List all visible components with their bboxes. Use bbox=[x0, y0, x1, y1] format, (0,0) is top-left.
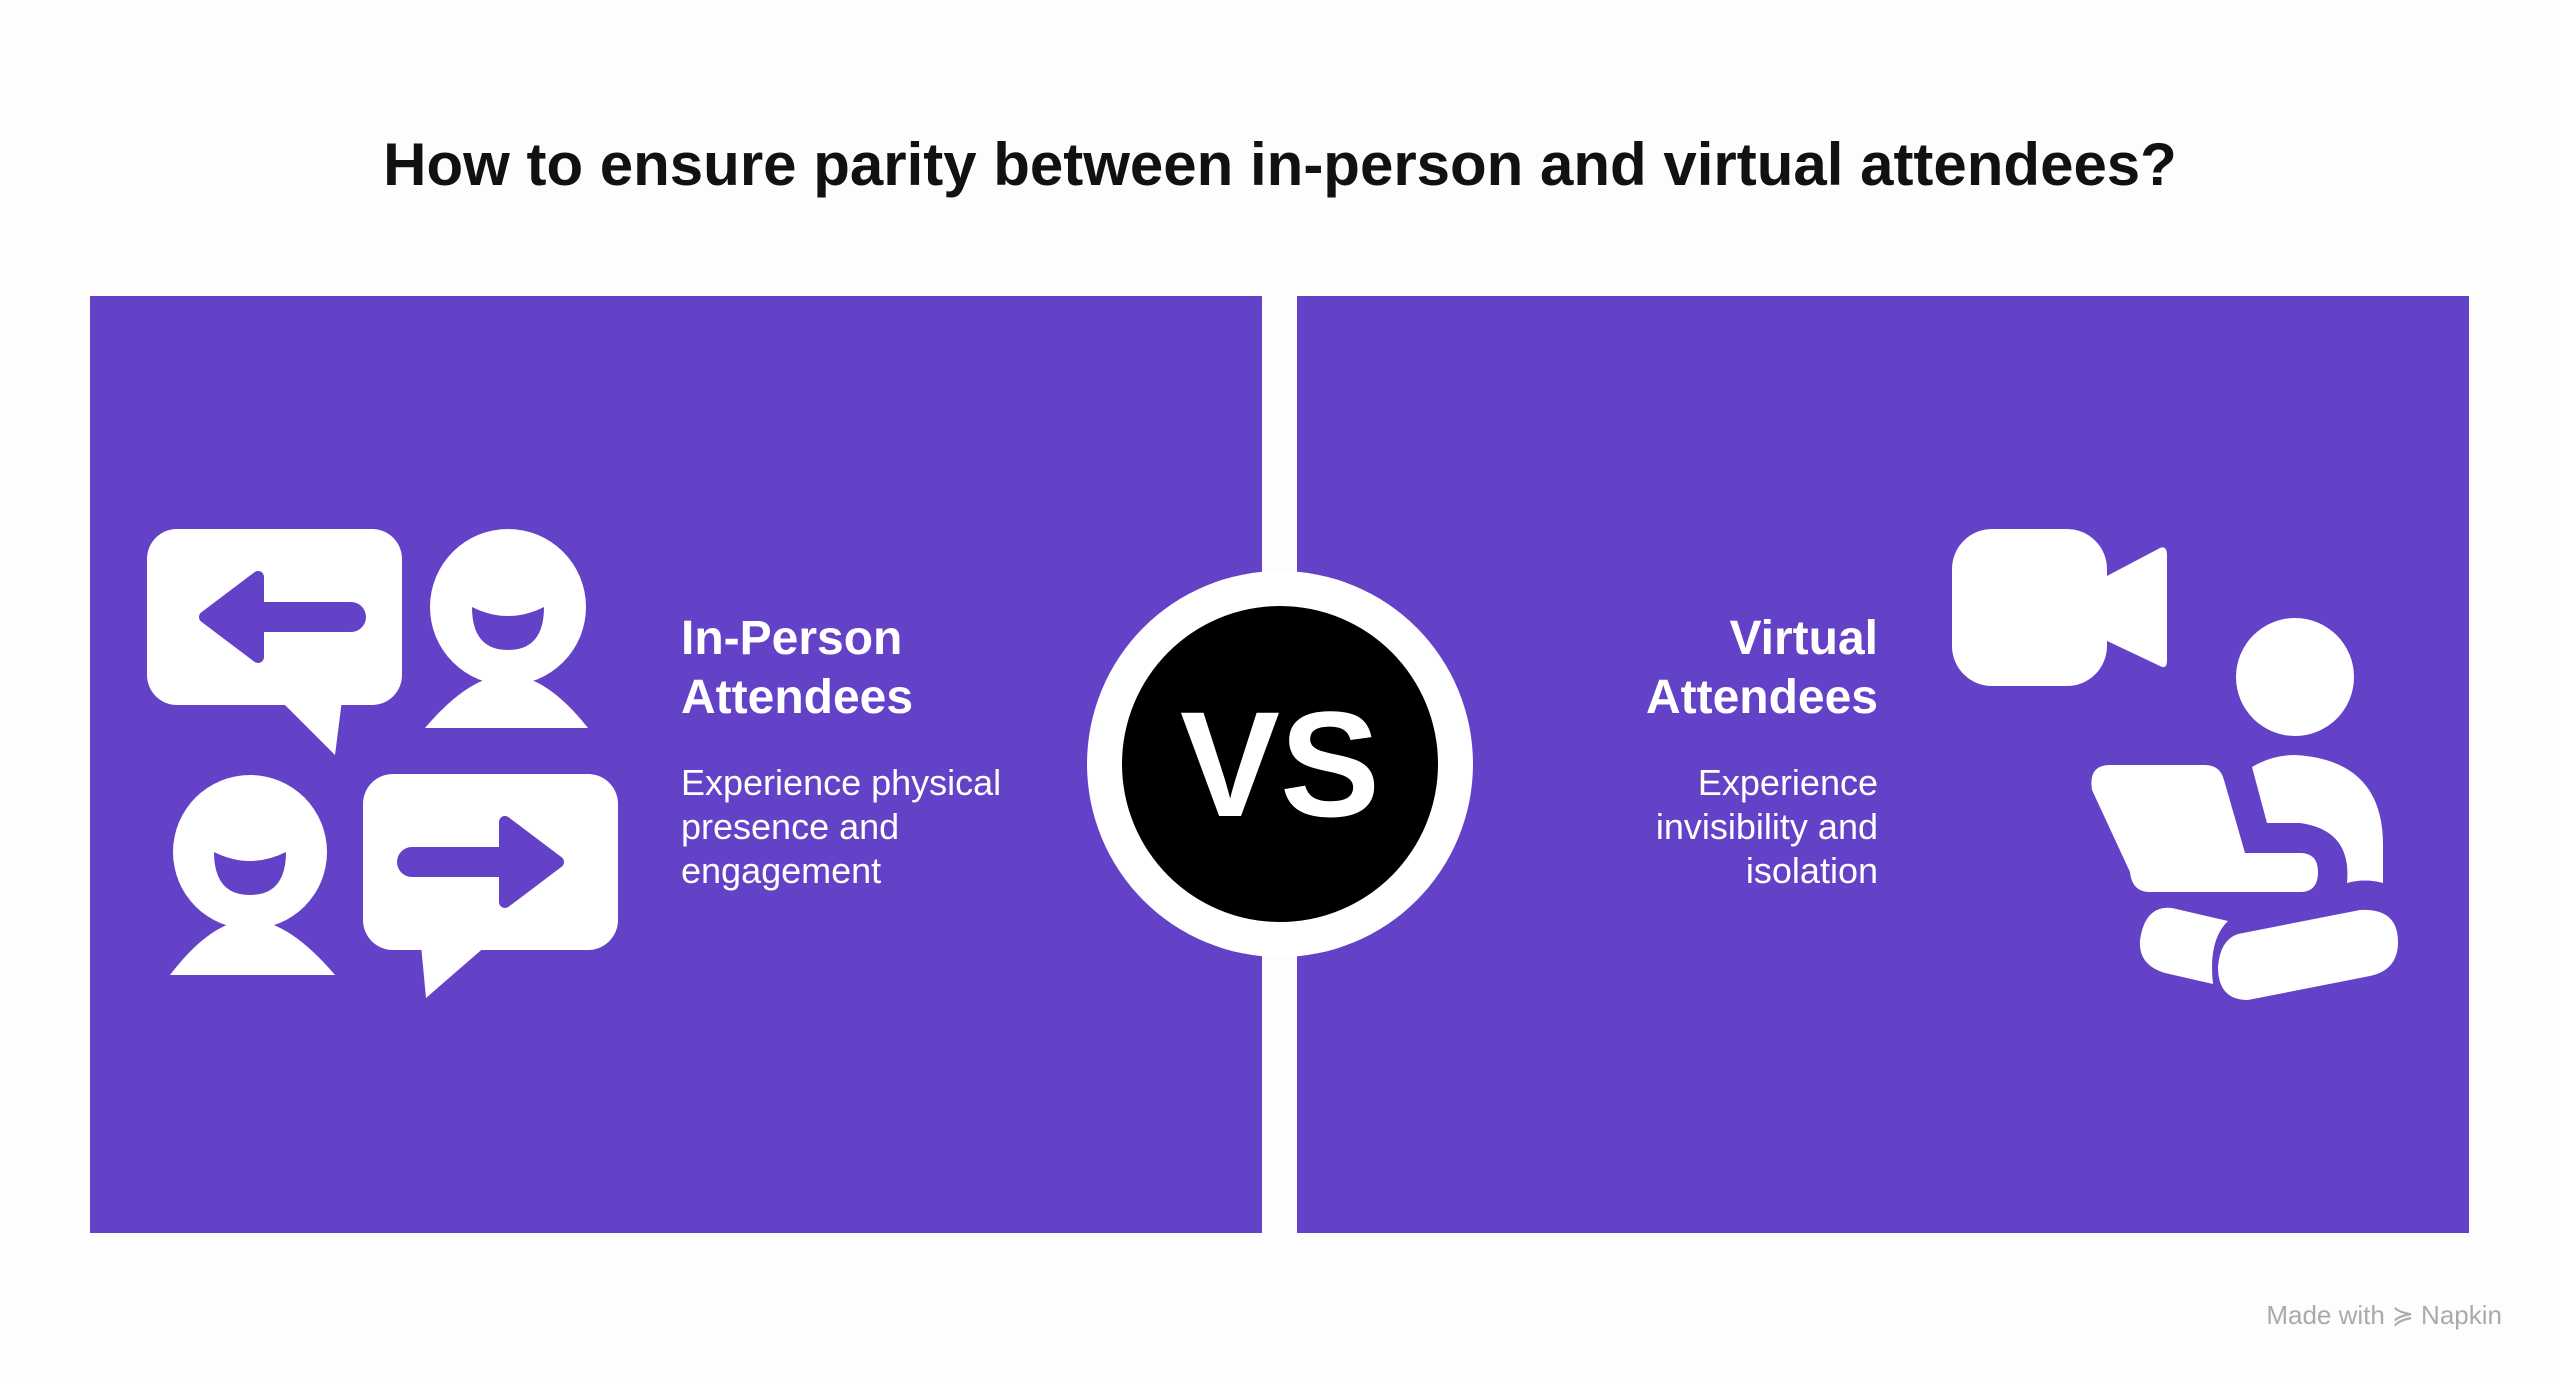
title: How to ensure parity between in-person and virtual attendees? bbox=[383, 131, 2177, 198]
icon: remote worker bbox=[1952, 529, 2398, 1000]
icon: conversation bbox=[147, 529, 618, 998]
text: virtual description: isolation bbox=[1746, 850, 1878, 891]
icon: VS circle bbox=[1087, 571, 1473, 957]
text: in-person description: Experience physical bbox=[681, 762, 1001, 803]
text: in-person description: engagement bbox=[681, 850, 881, 891]
footer: made with napkin: Made with ≽ Napkin bbox=[2266, 1300, 2502, 1330]
icon: VS circle: VS bbox=[1180, 680, 1380, 848]
heading: virtual: Attendees bbox=[1646, 671, 1878, 724]
text: virtual description: Experience bbox=[1698, 762, 1878, 803]
text: in-person description: presence and bbox=[681, 806, 899, 847]
heading: virtual: Virtual bbox=[1730, 612, 1878, 665]
text: virtual description: invisibility and bbox=[1656, 806, 1878, 847]
panel: in-person bbox=[90, 296, 1262, 1233]
heading: in-person: In-Person bbox=[681, 612, 902, 665]
heading: in-person: Attendees bbox=[681, 671, 913, 724]
panel: virtual bbox=[1297, 296, 2469, 1233]
